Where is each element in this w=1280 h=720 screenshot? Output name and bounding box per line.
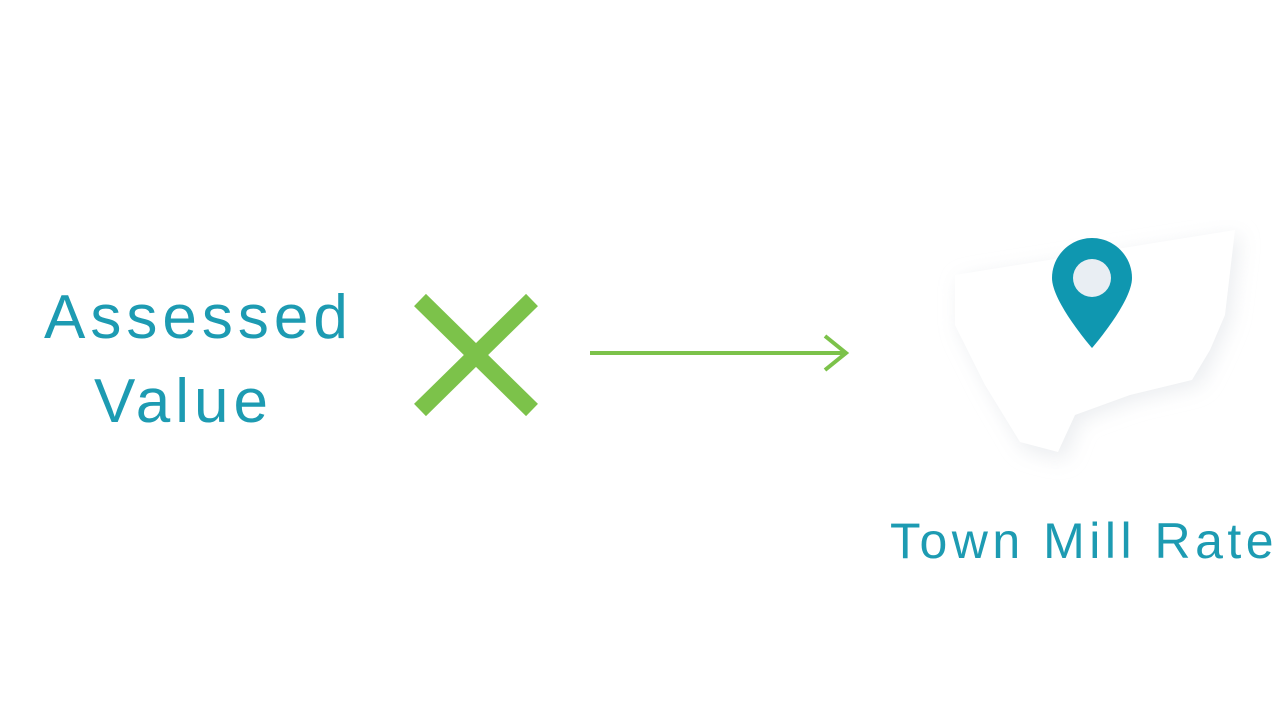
text: assessed value: Value bbox=[94, 367, 273, 436]
arrow bbox=[590, 334, 850, 372]
icon: multiply sign bbox=[414, 294, 538, 416]
text: assessed value: Assessed bbox=[44, 283, 353, 352]
text: town mill rate: Town Mill Rate bbox=[890, 513, 1278, 569]
icon: location pin bbox=[1052, 238, 1132, 348]
map with pin bbox=[990, 238, 1240, 458]
text: assessed value bbox=[44, 283, 353, 436]
